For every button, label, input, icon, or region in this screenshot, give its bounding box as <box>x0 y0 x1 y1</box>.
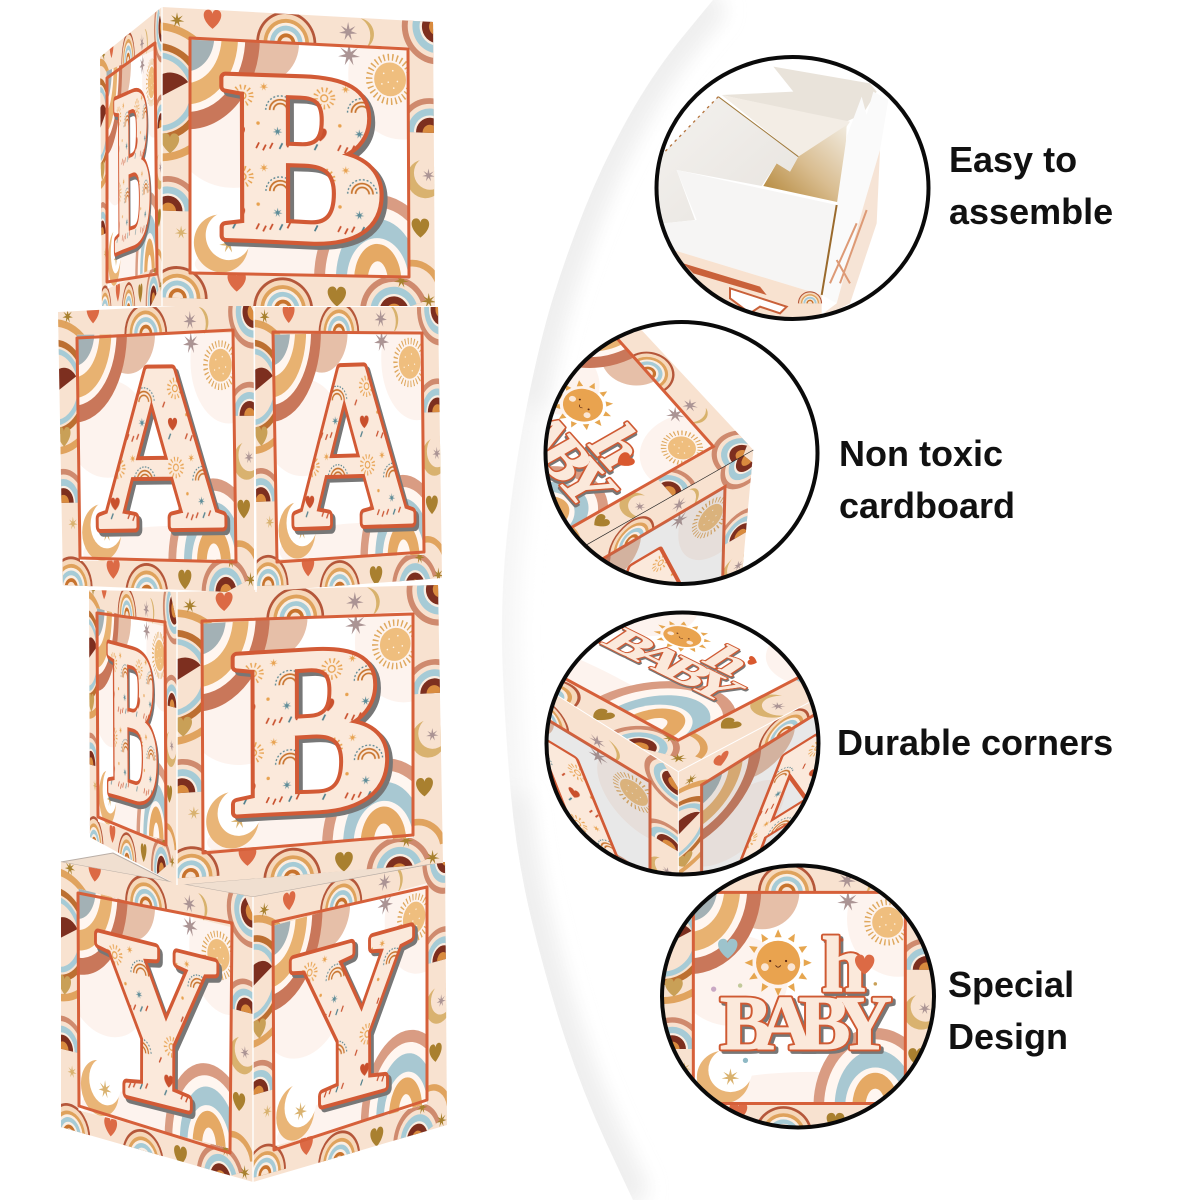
detail circle: special design: BABY <box>720 980 892 1066</box>
block 1: letter B: B <box>221 22 384 294</box>
block 3: letter B: B <box>233 593 390 864</box>
detail circle: special design: h <box>821 921 866 1009</box>
label: easy to assemble: assemble <box>949 191 1113 232</box>
detail circle: durable corners: A <box>482 668 636 928</box>
block 4: letter Y: Y <box>95 880 218 1167</box>
block 2: letter A: A <box>294 317 417 579</box>
label: non toxic cardboard: Non toxic <box>839 433 1003 474</box>
detail circle: durable corners <box>544 610 820 876</box>
detail circle: special design: BABY <box>722 983 895 1069</box>
block 2: letter A: A <box>99 320 228 582</box>
detail circle: durable corners: BABY <box>592 623 756 711</box>
detail circle: non toxic cardboard: h <box>573 415 661 478</box>
detail circle: non toxic cardboard: A <box>573 481 713 746</box>
detail circle: open box assembly <box>650 50 940 330</box>
block 4: letter Y: Y <box>290 874 414 1163</box>
block 3: letter B: B <box>233 593 390 864</box>
block 3: letter B: B <box>237 596 394 867</box>
detail circle: durable corners: h <box>692 639 765 682</box>
block 3: letter B: B <box>108 597 160 858</box>
block 4: letter Y: Y <box>293 877 417 1165</box>
block 1: letter B: B <box>114 33 151 300</box>
label: special design <box>948 964 1074 1057</box>
detail circle: durable corners: A <box>724 666 875 926</box>
label: easy to assemble <box>949 139 1113 232</box>
label: non toxic cardboard <box>839 433 1015 526</box>
background curved panel with soft inner shadow <box>502 0 722 1200</box>
label: easy to assemble: Easy to <box>949 139 1077 180</box>
block 1: letter B: B <box>225 26 388 298</box>
block 2: letter A: A <box>96 316 225 578</box>
block 2: letter A: A <box>96 316 225 578</box>
detail circle: non toxic cardboard: A <box>573 481 713 746</box>
detail circle: durable corners: BABY <box>591 621 756 710</box>
block 4: letter Y: Y <box>290 874 414 1163</box>
detail circle: special design: BABY <box>720 980 892 1066</box>
detail circle: special design: h <box>824 924 868 1011</box>
detail circle: non toxic cardboard: BABY <box>476 379 632 521</box>
detail circle: non toxic cardboard <box>544 320 820 586</box>
detail circle: special design <box>660 864 936 1130</box>
block 3: letter B: B <box>107 593 158 854</box>
block 4: letter Y <box>13 777 466 1200</box>
detail circle: non toxic cardboard: h <box>573 418 661 481</box>
label: special design: Special <box>948 964 1074 1005</box>
block 1: letter B <box>100 7 435 306</box>
label: special design: Design <box>948 1016 1068 1057</box>
detail circle: non toxic cardboard: BABY <box>476 376 633 518</box>
block stack spelling BABY <box>58 7 447 1182</box>
detail circle: non toxic cardboard: h <box>573 415 661 478</box>
block 1: letter B: B <box>221 22 384 294</box>
block 2: letter A <box>58 306 442 592</box>
detail circle: special design: h <box>821 921 866 1009</box>
block 3: letter B <box>89 585 443 885</box>
block 4: letter Y: Y <box>95 880 218 1167</box>
block 1: letter B: B <box>114 33 151 300</box>
label: non toxic cardboard: cardboard <box>839 485 1015 526</box>
block 2: letter A: A <box>291 313 414 576</box>
block 4: letter Y: Y <box>98 884 221 1171</box>
detail circle: durable corners: BABY <box>591 621 756 710</box>
block 2: letter A: A <box>291 313 414 576</box>
detail circle: durable corners: A <box>482 668 636 928</box>
detail circle: non toxic cardboard: BABY <box>476 376 633 518</box>
label: durable corners: Durable corners <box>837 722 1113 763</box>
block 1: letter B: B <box>114 36 152 304</box>
block 3: letter B: B <box>107 593 158 854</box>
detail circle: durable corners: A <box>724 666 875 926</box>
detail circle: durable corners: h <box>692 639 765 682</box>
detail circle: durable corners: h <box>692 640 766 684</box>
